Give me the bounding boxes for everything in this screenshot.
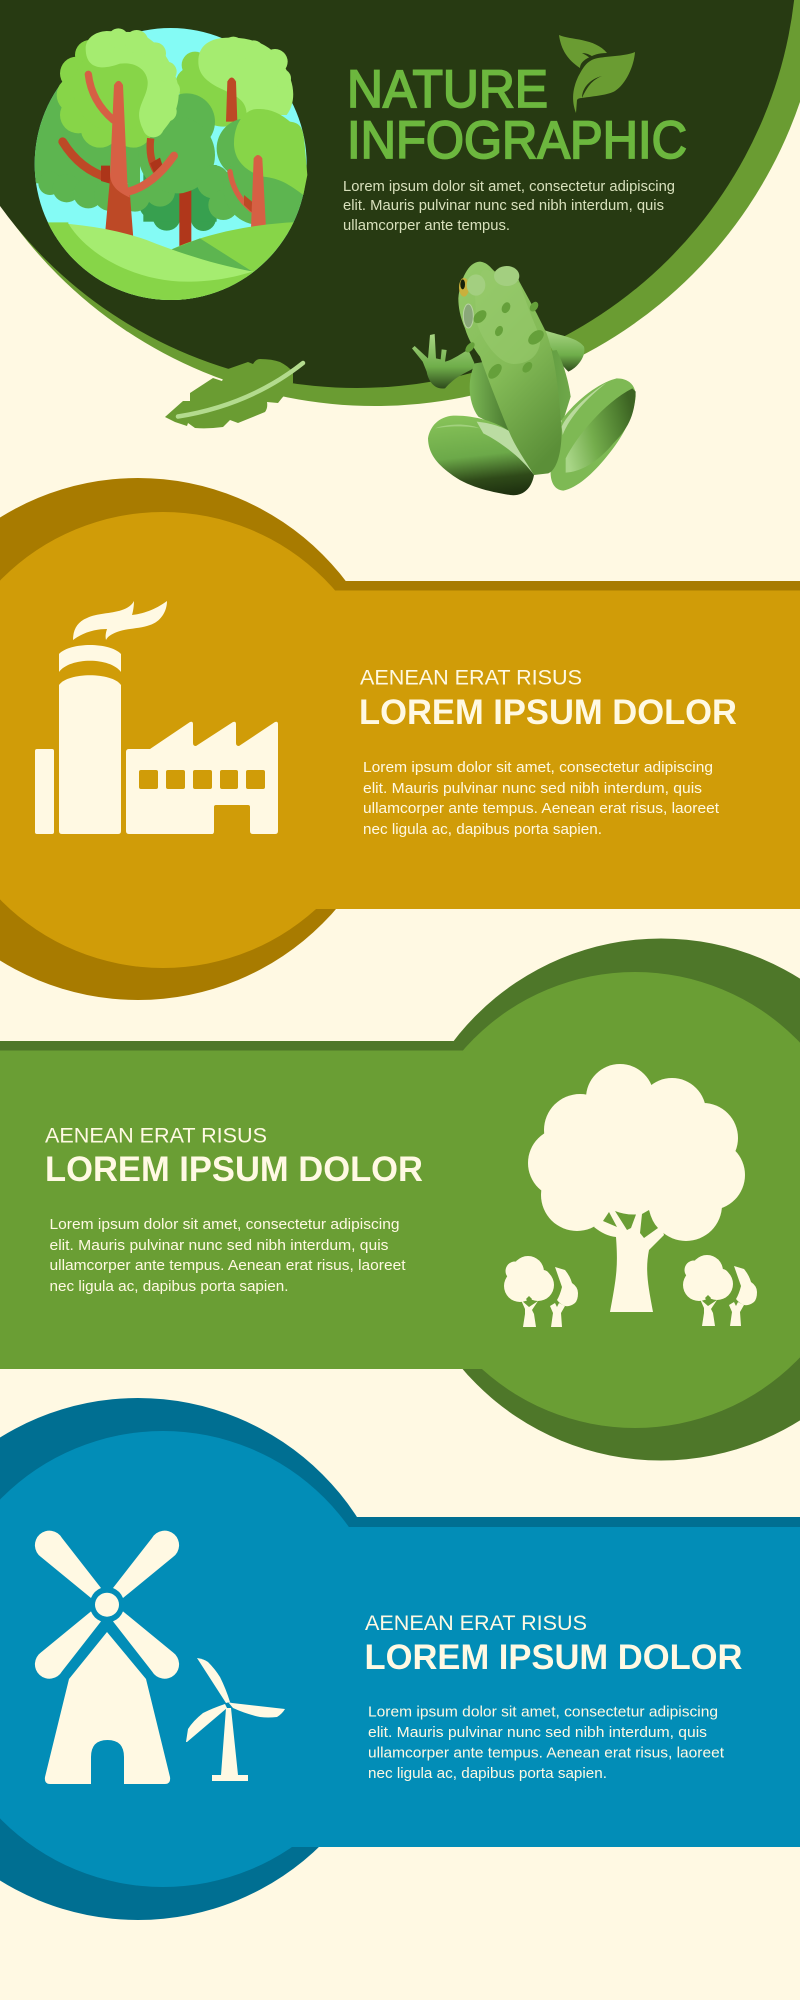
frog right arm [544,330,584,372]
section 2: trees [0,938,800,1460]
title: INFOGRAPHIC [347,111,687,170]
icon: frog [412,262,636,495]
section 2 body: Lorem ipsum dolor sit amet, consectetur adipiscing [50,1216,400,1233]
section 1 body: elit. Mauris pulvinar nunc sed nibh interdum, quis [363,780,702,797]
section 3 body: Lorem ipsum dolor sit amet, consectetur adipiscing [368,1704,718,1720]
intro text: ullamcorper ante tempus. [343,218,510,234]
icon: small trees left [504,1256,578,1327]
panel face [0,512,800,968]
section 3 heading: LOREM IPSUM DOLOR [364,1638,742,1677]
section 1 body: ullamcorper ante tempus. Aenean erat risus, laoreet [363,800,720,817]
section 2 body: elit. Mauris pulvinar nunc sed nibh interdum, quis [50,1237,388,1254]
title: NATURE [347,60,548,119]
icon: big tree [528,1064,745,1312]
frog left hind leg [428,416,534,495]
section 3 body: nec ligula ac, dapibus porta sapien. [368,1765,607,1782]
section 3 body: ullamcorper ante tempus. Aenean erat risus, laoreet [368,1744,725,1762]
icon: wind turbine [186,1658,285,1781]
section 2 body: ullamcorper ante tempus. Aenean erat risus, laoreet [50,1257,406,1274]
panel face [0,972,800,1428]
frog ear [463,304,473,328]
icon: forest landscape [20,28,307,315]
middle tree crown [20,88,307,228]
frog left arm [412,334,476,389]
left tree trunk [63,74,174,238]
frog eye [459,278,469,297]
icon: windmill [35,1531,179,1784]
section 1: factory [0,478,800,1000]
panel backing dark [0,938,800,1460]
section 1 heading: LOREM IPSUM DOLOR [359,693,737,732]
section 2 body [50,1216,406,1295]
right tree crown [234,109,307,195]
panel face [0,1431,800,1887]
section 1 body [363,759,720,838]
frog spots [464,300,547,381]
back right tree [176,37,293,127]
section 3 subtitle: AENEAN ERAT RISUS [365,1611,587,1635]
icon: factory [35,601,278,834]
intro text [343,179,675,234]
intro text: Lorem ipsum dolor sit amet, consectetur adipiscing [343,179,675,195]
section 2 subtitle: AENEAN ERAT RISUS [45,1124,267,1148]
panel backing dark [0,1398,800,1920]
frog eye bumps [467,266,519,296]
panel backing dark [0,478,800,1000]
section 3: windmill [0,1398,800,1920]
icon: leaf on rim [165,359,303,428]
title [347,60,687,170]
frog lower body [470,350,571,433]
section 1 body: Lorem ipsum dolor sit amet, consectetur adipiscing [363,759,713,776]
section 3 body: elit. Mauris pulvinar nunc sed nibh interdum, quis [368,1724,707,1741]
section 1 subtitle: AENEAN ERAT RISUS [360,666,582,690]
section 3 body [368,1704,725,1782]
icon: leaves [559,35,635,113]
icon: small trees right [683,1255,757,1326]
frog back [458,262,562,475]
section 1 body: nec ligula ac, dapibus porta sapien. [363,821,602,838]
section 2 body: nec ligula ac, dapibus porta sapien. [50,1278,288,1295]
hills [48,222,294,300]
right tree trunk [230,155,266,228]
frog right hind leg [551,378,636,491]
intro text: elit. Mauris pulvinar nunc sed nibh interdum, quis [343,198,664,214]
left tree crown [57,28,180,148]
section 2 heading: LOREM IPSUM DOLOR [45,1150,423,1189]
header blob [0,0,800,406]
